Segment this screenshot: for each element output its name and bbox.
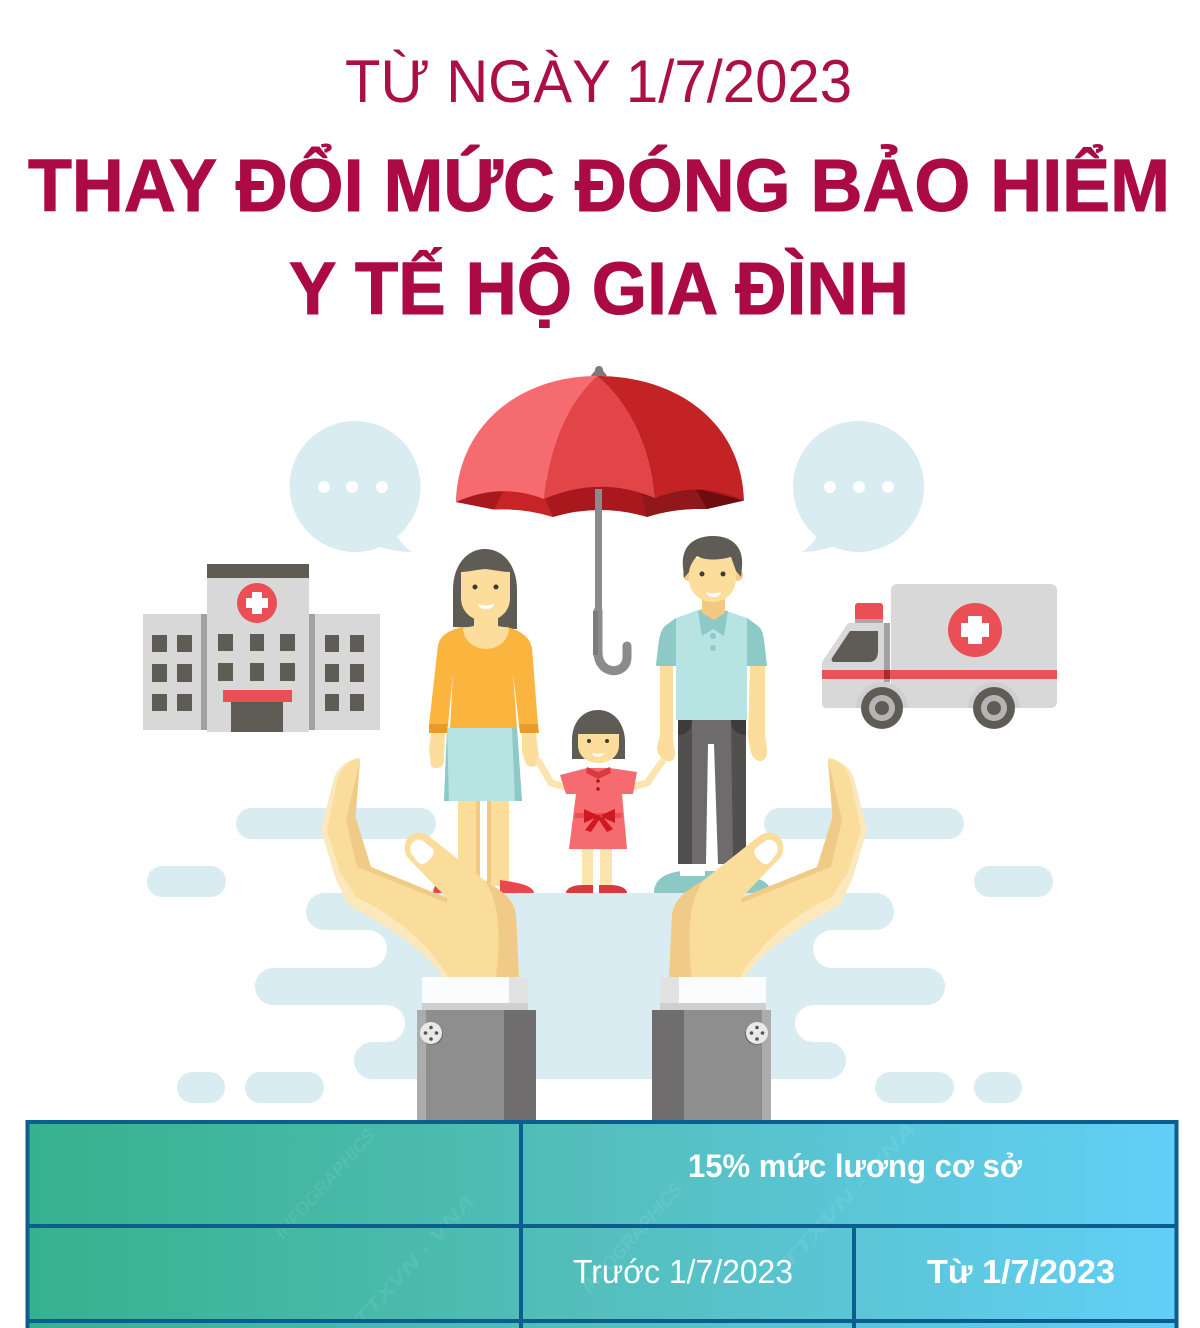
table: contribution levels: INFOGRAPHICS	[578, 1179, 688, 1297]
table header: base salary share: 15% mức lương cơ sở	[688, 1148, 1022, 1184]
icon: speech bubble left	[290, 421, 420, 552]
icon: ambulance	[822, 584, 1057, 729]
figure: mother	[429, 549, 539, 893]
icon: speech bubble right	[793, 421, 924, 552]
icon: right caring hand with sleeve	[652, 758, 867, 1120]
table: contribution levels: TTXVN - VNA	[778, 1118, 921, 1273]
table: contribution levels	[26, 1118, 1178, 1328]
figure: father	[654, 536, 771, 893]
table: contribution levels: INFOGRAPHICS	[271, 1125, 381, 1243]
icon: umbrella	[456, 366, 744, 671]
title: date line: TỪ NGÀY 1/7/2023	[345, 48, 852, 115]
background clouds	[147, 808, 1053, 1103]
title: main heading line 2: Y TẾ HỘ GIA ĐÌNH	[289, 247, 909, 330]
figure: child	[539, 710, 662, 893]
icon: left caring hand with sleeve	[321, 758, 536, 1120]
icon: hospital building	[143, 564, 380, 732]
title: main heading line 1: THAY ĐỔI MỨC ĐÓNG BẢO HIỂM	[28, 144, 1170, 227]
table header: before date: Trước 1/7/2023	[573, 1253, 793, 1290]
table header: from date: Từ 1/7/2023	[927, 1253, 1115, 1290]
